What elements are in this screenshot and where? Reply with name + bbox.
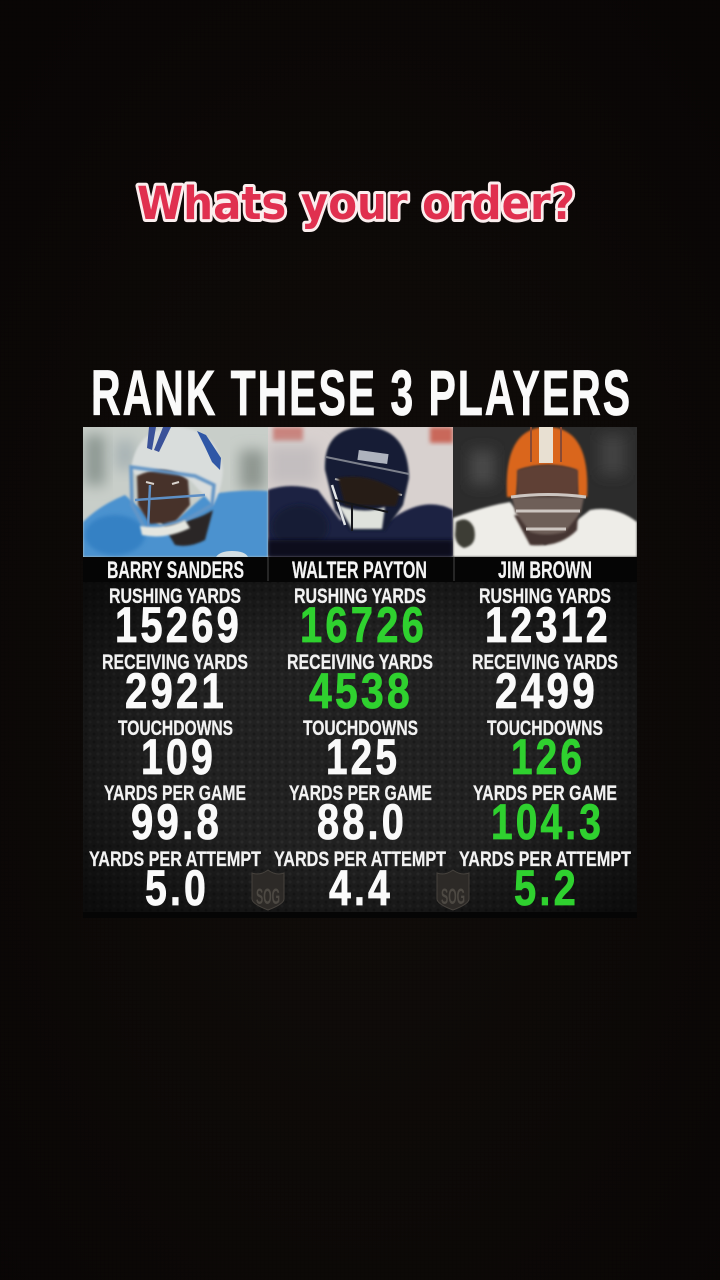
stat column: Walter Payton: TOUCHDOWNS (303, 717, 418, 740)
name: Jim Brown: JIM BROWN (498, 557, 592, 584)
stat column: Jim Brown: YARDS PER GAME (473, 782, 617, 805)
stat column: Jim Brown: RECEIVING YARDS (472, 651, 618, 674)
name: Barry Sanders: BARRY SANDERS (107, 557, 244, 584)
stat column: Walter Payton: RECEIVING YARDS (287, 651, 433, 674)
stat column: Barry Sanders: 109 (141, 729, 216, 785)
stat column: Barry Sanders: RUSHING YARDS (109, 585, 241, 608)
icon: SOG shield watermark right (437, 870, 469, 910)
stat column: Walter Payton: 16726 (300, 597, 427, 653)
stat column: Jim Brown: 5.2 (514, 860, 579, 916)
stat column: Jim Brown: YARDS PER ATTEMPT (459, 848, 631, 871)
icon: SOG shield watermark left: SOG (256, 884, 280, 909)
stat column: Walter Payton: 88.0 (317, 794, 407, 850)
name band (83, 557, 637, 584)
stat column: Barry Sanders: TOUCHDOWNS (118, 717, 233, 740)
stat column: Barry Sanders (89, 585, 261, 916)
stat column: Walter Payton: YARDS PER GAME (289, 782, 432, 805)
stat column: Walter Payton: RUSHING YARDS (294, 585, 426, 608)
stat column: Walter Payton: YARDS PER ATTEMPT (274, 848, 446, 871)
stat column: Barry Sanders: 99.8 (131, 794, 222, 850)
name: Walter Payton: WALTER PAYTON (292, 557, 427, 584)
stat column: Walter Payton (274, 585, 446, 916)
stat column: Barry Sanders: 5.0 (145, 860, 209, 916)
photo: Jim Brown (453, 427, 637, 557)
stat column: Walter Payton: 4.4 (329, 860, 393, 916)
stat column: Walter Payton: 125 (326, 729, 400, 785)
icon: SOG shield watermark right: SOG (441, 884, 465, 909)
stat column: Barry Sanders: YARDS PER ATTEMPT (89, 848, 261, 871)
stat column: Jim Brown (459, 585, 631, 916)
stat column: Barry Sanders: RECEIVING YARDS (102, 651, 248, 674)
stat column: Barry Sanders: YARDS PER GAME (104, 782, 246, 805)
caption: Whats your order?: Whats your order? (137, 177, 575, 230)
stat column: Jim Brown: 126 (511, 729, 585, 785)
icon: SOG shield watermark left (252, 870, 284, 910)
panel: player comparison (83, 427, 637, 918)
stat column: Jim Brown: 12312 (485, 597, 611, 653)
stat column: Jim Brown: 2499 (495, 663, 598, 719)
stat column: Jim Brown: 104.3 (491, 794, 604, 850)
stat column: Jim Brown: RUSHING YARDS (479, 585, 611, 608)
stat column: Walter Payton: 4538 (309, 663, 413, 719)
stat column: Jim Brown: TOUCHDOWNS (487, 717, 603, 740)
stats panel background (83, 582, 637, 918)
photo: Barry Sanders (83, 427, 268, 557)
stat column: Barry Sanders: 2921 (125, 663, 227, 719)
infographic canvas (83, 182, 637, 912)
stat column: Barry Sanders: 15269 (115, 597, 242, 653)
photo: Walter Payton (268, 427, 453, 557)
